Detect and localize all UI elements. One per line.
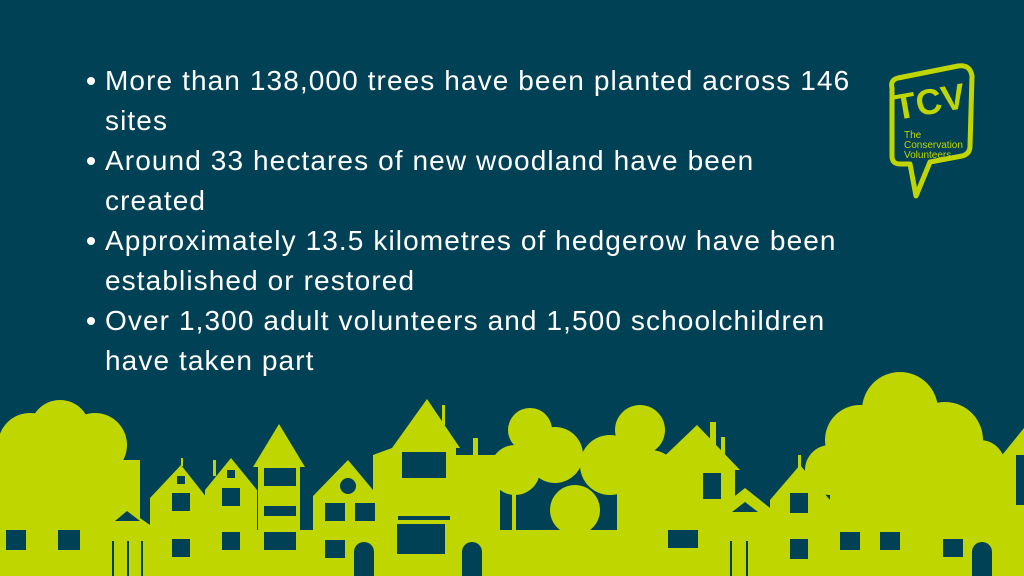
- bullet: trees: More than 138,000 trees have been planted across 146: [105, 65, 850, 96]
- logo: TCV: Conservation: [904, 140, 963, 151]
- bullet: woodland: [84, 141, 850, 220]
- tree: left big: [0, 400, 140, 576]
- bullet: woodland: Around 33 hectares of new woodland have been: [105, 145, 754, 176]
- bullet: woodland: created: [105, 184, 206, 216]
- bullet: hedgerow: Approximately 13.5 kilometres of hedgerow have been: [105, 225, 837, 256]
- windows and doors: [6, 452, 1024, 576]
- bullet: volunteers: have taken part: [105, 344, 315, 376]
- houses: [0, 399, 1024, 576]
- logo: TCV: Volunteers: [904, 150, 951, 161]
- logo: TCV: The: [904, 130, 922, 141]
- bullet: volunteers: Over 1,300 adult volunteers and 1,500 schoolchildren: [105, 305, 825, 336]
- bullet: volunteers: [84, 301, 850, 380]
- logo: TCV: [889, 63, 974, 198]
- tree: centre pair: [490, 405, 680, 555]
- bullet: trees: sites: [105, 104, 168, 136]
- bullet list: [87, 65, 850, 376]
- logo: TCV: TCV: [891, 75, 969, 128]
- bullet: hedgerow: [84, 221, 850, 300]
- bullet: trees: [84, 61, 850, 140]
- bullet: hedgerow: established or restored: [105, 264, 415, 296]
- tree: right big: [805, 372, 1005, 520]
